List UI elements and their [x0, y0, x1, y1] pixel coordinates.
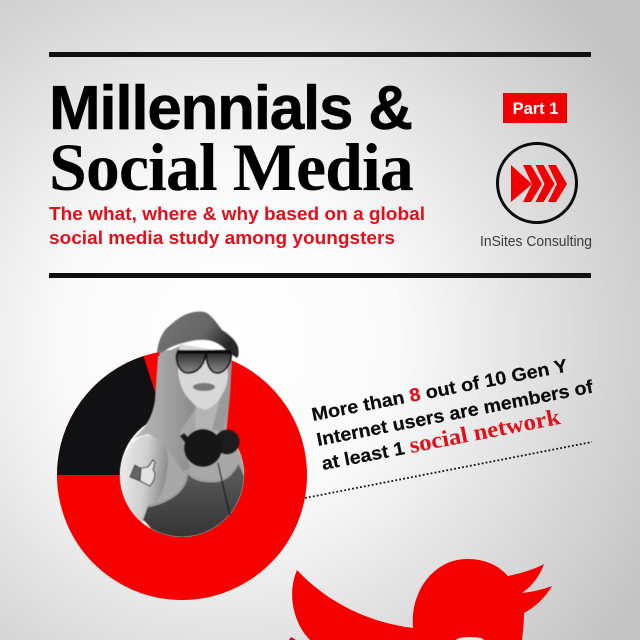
subtitle: social media study among youngsters	[49, 227, 395, 248]
stat text: 8 out of 10: social network	[407, 404, 562, 458]
subtitle	[49, 203, 425, 248]
arm	[118, 435, 168, 522]
donut chart	[57, 350, 307, 600]
headphones	[180, 429, 240, 515]
hair	[134, 345, 196, 472]
figure base behind hair and neck	[155, 350, 230, 470]
tank top	[143, 463, 248, 540]
bottom header rule	[49, 273, 591, 278]
title	[49, 74, 413, 205]
chest skin	[156, 448, 244, 503]
thumbs-up tattoo	[130, 460, 155, 486]
donut segment: members	[57, 350, 307, 600]
dotted leader line	[305, 442, 592, 498]
stat text: 8 out of 10: More than 8 out of 10 Gen Y	[310, 355, 570, 425]
logo wordmark: InSites Consulting	[480, 233, 592, 250]
badge: Part 1	[503, 93, 567, 123]
subtitle: The what, where & why based on a global	[49, 203, 425, 224]
badge: Part 1: Part 1	[513, 100, 558, 118]
donut segment: non-members	[57, 356, 163, 475]
title: Millennials &	[49, 74, 412, 143]
bird highlight	[456, 637, 484, 640]
lips	[193, 383, 215, 391]
stat text: 8 out of 10	[310, 355, 595, 474]
title: Social Media	[49, 129, 413, 205]
photo: girl with cap, sunglasses and headphones	[118, 312, 248, 540]
stat text: 8 out of 10: at least 1	[320, 437, 406, 474]
stat text: 8 out of 10: Internet users are members of	[315, 376, 595, 450]
sunglasses	[177, 350, 231, 373]
bird icon	[292, 559, 552, 640]
top rule	[49, 52, 591, 57]
bird lower-left fragment	[289, 637, 296, 640]
cap	[157, 312, 239, 358]
neck	[195, 395, 223, 446]
face	[178, 344, 228, 409]
logo: InSites Consulting arrows	[498, 144, 576, 222]
